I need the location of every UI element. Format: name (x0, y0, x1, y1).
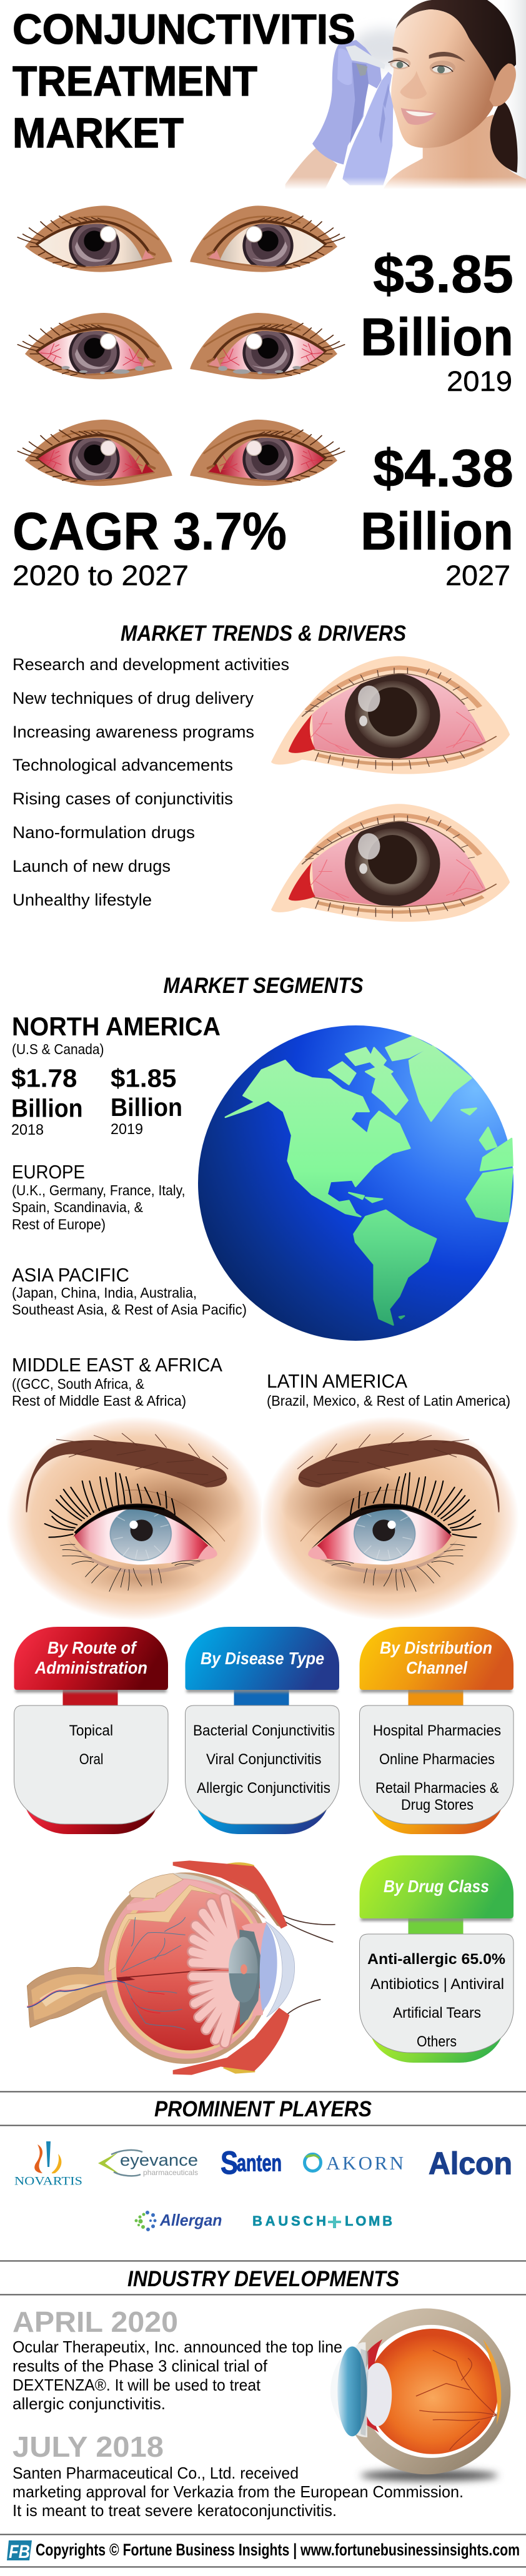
region: Asia Pacific: ASIA PACIFIC (12, 1264, 129, 1286)
region: Middle East and Africa: ((GCC, South Africa, & (12, 1376, 144, 1392)
heading: market trends: MARKET TRENDS & DRIVERS (121, 621, 406, 646)
region: Europe: Rest of Europe) (12, 1216, 106, 1233)
stat: North America 2019: $1.85 (111, 1064, 176, 1093)
region: Europe: Spain, Scandinavia, & (12, 1199, 143, 1215)
stat: CAGR (12, 502, 287, 591)
region: Latin America: (Brazil, Mexico, & Rest of Latin America) (267, 1393, 510, 1409)
card: by distribution channel: Retail Pharmacies & (375, 1780, 499, 1797)
development: April 2020: Ocular Therapeutix, Inc. announced the top line (12, 2337, 342, 2356)
development: April 2020 (12, 2306, 342, 2413)
icon: red eye upper (271, 656, 510, 774)
logo: Akorn: AKORN (326, 2152, 404, 2174)
logo: eyevance: eyevance (120, 2151, 198, 2169)
logo: Alcon: Alcon (429, 2146, 512, 2181)
card: by distribution channel: Hospital Pharmacies (373, 1722, 501, 1739)
stat: CAGR: CAGR 3.7% (12, 502, 287, 561)
development: July 2018 (12, 2430, 464, 2520)
card: by disease type (185, 1627, 339, 1834)
region: Middle East and Africa (12, 1354, 222, 1409)
icon: red eye lower (271, 804, 510, 922)
illustration: eye anatomy cross-section (27, 1860, 335, 2075)
logo: Bausch and Lomb: BAUSCH (252, 2213, 326, 2229)
region: Europe: (U.K., Germany, France, Italy, (12, 1182, 185, 1198)
stat: market size 2027: 2027 (445, 560, 510, 591)
stat: North America 2018: 2018 (11, 1122, 44, 1138)
card: by disease type: Bacterial Conjunctivitis (193, 1722, 335, 1739)
heading: prominent players: PROMINENT PLAYERS (154, 2097, 372, 2121)
region: Asia Pacific: Southeast Asia, & Rest of Asia Pacific) (12, 1301, 247, 1318)
card: by drug class: Antibiotics | Antiviral (370, 1976, 504, 1993)
list of drivers: Research and development activities (12, 655, 289, 674)
logo: Novartis (14, 2141, 82, 2188)
icon: Fortune Business Insights logo: FB (9, 2542, 30, 2562)
region: Europe (12, 1161, 185, 1233)
stat: CAGR: 2020 to 2027 (12, 560, 189, 591)
region: Latin America (267, 1370, 510, 1409)
card: by drug class: Others (417, 2033, 457, 2050)
development: July 2018: Santen Pharmaceutical Co., Ltd. received (12, 2464, 299, 2482)
stat: market size 2027 (360, 439, 514, 591)
logo: eyevance: pharmaceuticals (143, 2168, 198, 2177)
card: by drug class: Anti-allergic 65.0% (367, 1951, 505, 1968)
region: North America (11, 1012, 221, 1138)
card: by drug class: By Drug Class (384, 1877, 489, 1896)
stat: North America 2019 (111, 1064, 182, 1138)
card: by route of administration: Oral (79, 1751, 103, 1768)
logo: eyevance (98, 2150, 198, 2177)
stat: North America 2018: Billion (11, 1094, 83, 1123)
eyes: severe conjunctivitis pair (17, 420, 345, 486)
eyes: mild conjunctivitis pair (17, 313, 345, 379)
footer: copyright (0, 2534, 526, 2568)
development: April 2020: APRIL 2020 (12, 2306, 178, 2338)
region: Latin America: LATIN AMERICA (267, 1370, 407, 1392)
region: Europe: EUROPE (12, 1161, 85, 1183)
list of drivers: Nano-formulation drugs (12, 823, 195, 842)
card: by distribution channel: Drug Stores (401, 1797, 474, 1814)
list of drivers: New techniques of drug delivery (12, 689, 254, 708)
stat: market size 2019: Billion (360, 308, 514, 367)
card: by disease type: By Disease Type (201, 1649, 324, 1668)
logo: Allergan (135, 2211, 222, 2231)
card: by distribution channel (360, 1627, 514, 1834)
stat: market size 2019 (360, 245, 514, 397)
title: MARKET (12, 109, 184, 157)
heading: industry developments: INDUSTRY DEVELOPMENTS (127, 2267, 399, 2291)
stat: market size 2019: 2019 (447, 365, 512, 397)
list of drivers: Increasing awareness programs (12, 723, 254, 741)
logo: Bausch and Lomb (252, 2213, 392, 2229)
development: July 2018: marketing approval for Verkazia from the European Commission. (12, 2482, 464, 2501)
region: Asia Pacific (12, 1264, 247, 1318)
title: TREATMENT (12, 57, 257, 105)
region: North America: NORTH AMERICA (12, 1012, 221, 1041)
panel: market trends and drivers (12, 621, 510, 922)
logo: Novartis: NOVARTIS (14, 2174, 82, 2188)
card: by disease type: Viral Conjunctivitis (206, 1751, 321, 1768)
card: by distribution channel: Channel (406, 1658, 468, 1677)
development: April 2020: allergic conjunctivitis. (12, 2394, 166, 2413)
illustration: pair of eyes close-up (6, 1416, 519, 1621)
logo: Santen (221, 2145, 282, 2181)
card: by route of administration: By Route of (47, 1638, 137, 1657)
development: July 2018: It is meant to treat severe keratoconjunctivitis. (12, 2501, 337, 2520)
development: April 2020: results of the Phase 3 clinical trial of (12, 2357, 268, 2376)
card: by distribution channel: By Distribution (380, 1638, 492, 1657)
globe (198, 1025, 514, 1341)
list of drivers: Unhealthy lifestyle (12, 891, 152, 909)
logo: Santen: S (221, 2145, 238, 2181)
region: Middle East and Africa: MIDDLE EAST & AFRICA (12, 1354, 222, 1376)
stat: North America 2019: 2019 (111, 1121, 143, 1138)
logo: Santen: anten (237, 2151, 282, 2177)
list of drivers: Rising cases of conjunctivitis (12, 789, 233, 808)
development: July 2018: JULY 2018 (12, 2430, 164, 2463)
card: by drug class (360, 1855, 514, 2063)
development: April 2020: DEXTENZA®. It will be used to treat (12, 2376, 261, 2394)
region: North America: (U.S & Canada) (12, 1041, 104, 1057)
title (12, 6, 355, 157)
list of drivers (12, 655, 289, 909)
region: Asia Pacific: (Japan, China, India, Australia, (12, 1285, 197, 1301)
title: CONJUNCTIVITIS (12, 6, 355, 53)
stat: North America 2018: $1.78 (11, 1064, 77, 1093)
list of drivers: Launch of new drugs (12, 857, 171, 876)
eyes: healthy pair (17, 205, 345, 272)
list of drivers: Technological advancements (12, 756, 233, 774)
card: by route of administration (14, 1627, 168, 1834)
stat: market size 2027: $4.38 (373, 439, 514, 498)
logo: Allergan: Allergan (159, 2211, 222, 2229)
logo: Bausch and Lomb: LOMB (345, 2213, 392, 2229)
card: by route of administration: Administration (34, 1658, 147, 1677)
card: by disease type: Allergic Conjunctivitis (197, 1780, 330, 1797)
heading: market segments: MARKET SEGMENTS (164, 974, 364, 998)
region: Middle East and Africa: Rest of Middle East & Africa) (12, 1393, 186, 1409)
stat: market size 2027: Billion (360, 502, 514, 561)
stat: North America 2019: Billion (111, 1093, 182, 1122)
card: by distribution channel: Online Pharmacies (379, 1751, 495, 1768)
stat: market size 2019: $3.85 (373, 245, 514, 304)
card: by route of administration: Topical (69, 1722, 113, 1739)
card: by drug class: Artificial Tears (393, 2005, 481, 2021)
photo: woman receiving eye drops (281, 0, 526, 190)
illustration: orange eyeball cross-section (330, 2309, 510, 2481)
stat: North America 2018 (11, 1064, 83, 1138)
